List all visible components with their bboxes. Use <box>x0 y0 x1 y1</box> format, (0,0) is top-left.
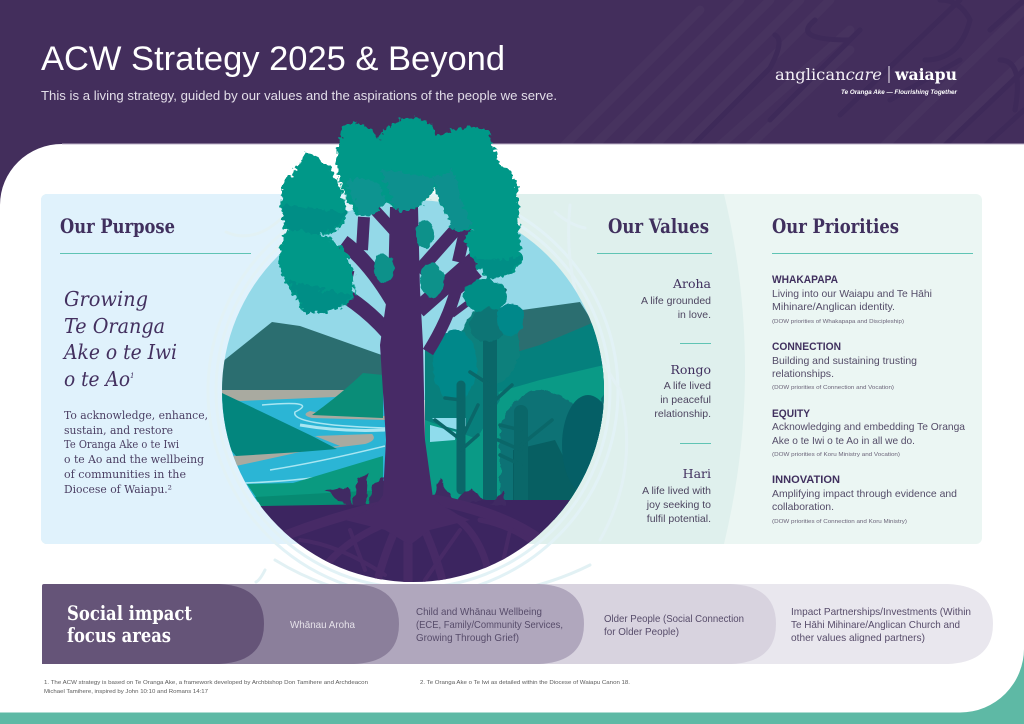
purpose heading: Our Purpose <box>60 215 175 238</box>
priority: Connection: (DOW priorities of Connection and Vocation) <box>772 385 894 391</box>
values column <box>597 215 712 525</box>
value: Rongo: relationship. <box>654 408 711 420</box>
value: Hari: A life lived with <box>642 485 711 497</box>
purpose description <box>64 409 208 496</box>
centre clump <box>378 117 439 211</box>
purpose statement: Ake o te Iwi <box>62 340 177 364</box>
segment: Whanau Aroha <box>200 584 399 664</box>
purpose description: o te Ao and the wellbeing <box>64 453 204 466</box>
value: Rongo: in peaceful <box>660 394 711 406</box>
segment: Impact Partnerships: Impact Partnerships/Investments (Within <box>791 606 971 618</box>
value: Hari: joy seeking to <box>646 499 711 511</box>
sky <box>222 200 604 400</box>
panel backgrounds <box>41 194 982 544</box>
logo <box>775 65 957 96</box>
value: Aroha <box>641 276 712 321</box>
purpose description: To acknowledge, enhance, <box>64 409 208 422</box>
segment: Child and Whanau Wellbeing <box>300 584 584 664</box>
purpose statement: Te Oranga <box>64 314 165 338</box>
value: Hari: fulfil potential. <box>647 513 711 525</box>
priority: Connection: CONNECTION <box>772 341 841 353</box>
priority: Innovation: INNOVATION <box>772 474 840 486</box>
small tree canopy <box>463 279 524 342</box>
segment: Child and Whanau Wellbeing: Child and Whānau Wellbeing <box>416 606 542 618</box>
priority: Equity <box>772 408 965 458</box>
left lower clump <box>278 231 354 313</box>
purpose description: Te Oranga Ake o te Iwi <box>64 438 179 451</box>
tree trunk <box>345 207 470 545</box>
priority: Equity: (DOW priorities of Koru Ministry and Vocation) <box>772 452 900 458</box>
footnote 2: 2. Te Oranga Ake o Te Iwi as detailed within the Diocese of Waiapu Canon 18. <box>420 680 630 686</box>
segment: Child and Whanau Wellbeing: Growing Through Grief) <box>416 632 519 644</box>
priority: Whakapapa: Living into our Waiapu and Te Hāhi <box>772 288 932 300</box>
right mountains <box>425 302 604 520</box>
illustration: main tree <box>278 117 524 545</box>
purpose statement: Growing <box>64 287 148 311</box>
social impact focus areas bar <box>42 584 993 664</box>
purpose statement: 1 <box>130 372 134 380</box>
priority: Connection: relationships. <box>772 368 834 380</box>
purpose statement <box>62 287 177 391</box>
centre-left clump <box>336 124 389 216</box>
value: Rongo <box>654 362 711 420</box>
subtitle: This is a living strategy, guided by our values and the aspirations of the people we serve. <box>41 88 557 103</box>
values heading: Our Values <box>608 215 709 238</box>
priority: Equity: Ake o te Iwi o te Ao in all we do. <box>772 435 915 447</box>
river <box>222 373 397 508</box>
priority: Connection: Building and sustaining trusting <box>772 355 917 367</box>
priority: Connection <box>772 341 917 391</box>
title: ACW Strategy 2025 & Beyond <box>41 40 505 78</box>
segment: Older People: Older People (Social Connection <box>604 613 744 625</box>
priority: Equity: EQUITY <box>772 408 811 420</box>
right clump <box>432 127 520 238</box>
priority: Innovation: Amplifying impact through evidence and <box>772 488 957 500</box>
purpose description: Diocese of Waiapu.² <box>64 483 172 496</box>
value: Rongo: A life lived <box>664 380 711 392</box>
ground <box>260 500 570 582</box>
illustration: landscape circle <box>222 200 614 600</box>
logo: waiapu <box>894 65 957 84</box>
background forest <box>433 305 614 505</box>
priority: Equity: Acknowledging and embedding Te Oranga <box>772 421 965 433</box>
left mountain <box>222 322 382 390</box>
roots <box>283 494 540 582</box>
segment: Impact Partnerships <box>600 584 993 664</box>
far-side river glimpse <box>430 418 466 442</box>
left upper clump <box>281 152 347 235</box>
value: Hari <box>642 466 711 525</box>
background tree trunks <box>435 290 552 505</box>
priority: Innovation <box>772 474 957 525</box>
priority: Innovation: collaboration. <box>772 501 834 513</box>
logo: anglicancare <box>775 66 882 84</box>
segment: heading <box>42 584 264 664</box>
value: Hari: Hari <box>683 466 711 481</box>
priority: Innovation: (DOW priorities of Connection and Koru Ministry) <box>772 519 907 525</box>
priorities column <box>772 215 973 525</box>
segment: Child and Whanau Wellbeing: (ECE, Family/Community Services, <box>416 619 563 631</box>
segment: Older People <box>500 584 776 664</box>
priorities heading: Our Priorities <box>772 215 899 238</box>
segment: Impact Partnerships: Te Hāhi Mihinare/Anglican Church and <box>791 619 960 631</box>
tree canopy <box>278 117 522 313</box>
logo: Te Oranga Ake — Flourishing Together <box>841 89 957 96</box>
footnote 1: 1. The ACW strategy is based on Te Oranga Ake, a framework developed by Archbishop Don Tamihere and Archdeacon <box>44 680 368 686</box>
value: Aroha: in love. <box>678 309 711 321</box>
priority: Whakapapa: WHAKAPAPA <box>772 274 838 286</box>
segment: heading: focus areas <box>67 623 171 647</box>
value: Rongo: Rongo <box>670 362 711 377</box>
purpose column <box>60 215 251 496</box>
segment: heading: Social impact <box>67 601 193 625</box>
right lower clump <box>464 220 522 278</box>
value: Aroha: Aroha <box>672 276 712 291</box>
decorative koru rings around circle <box>208 186 627 600</box>
footnote 1: Michael Tamihere, inspired by John 10:10 and Romans 14:17 <box>44 689 208 695</box>
tree branches <box>318 210 478 352</box>
header band <box>0 0 1024 150</box>
priority: Whakapapa: (DOW priorities of Whakapapa and Discipleship) <box>772 319 904 325</box>
segment: Older People: for Older People) <box>604 626 679 638</box>
purpose description: sustain, and restore <box>64 424 173 437</box>
segment: Impact Partnerships: other values aligned partners) <box>791 632 925 644</box>
priority: Whakapapa <box>772 274 932 325</box>
priority: Whakapapa: Mihinare/Anglican identity. <box>772 301 895 313</box>
purpose description: of communities in the <box>64 468 186 481</box>
small foliage behind branches <box>374 220 444 298</box>
footnote 1 <box>44 680 368 695</box>
segment: Whanau Aroha: Whānau Aroha <box>290 619 355 631</box>
ferns <box>325 474 505 505</box>
value: Aroha: A life grounded <box>641 295 711 307</box>
purpose statement: o te Ao <box>64 367 130 391</box>
